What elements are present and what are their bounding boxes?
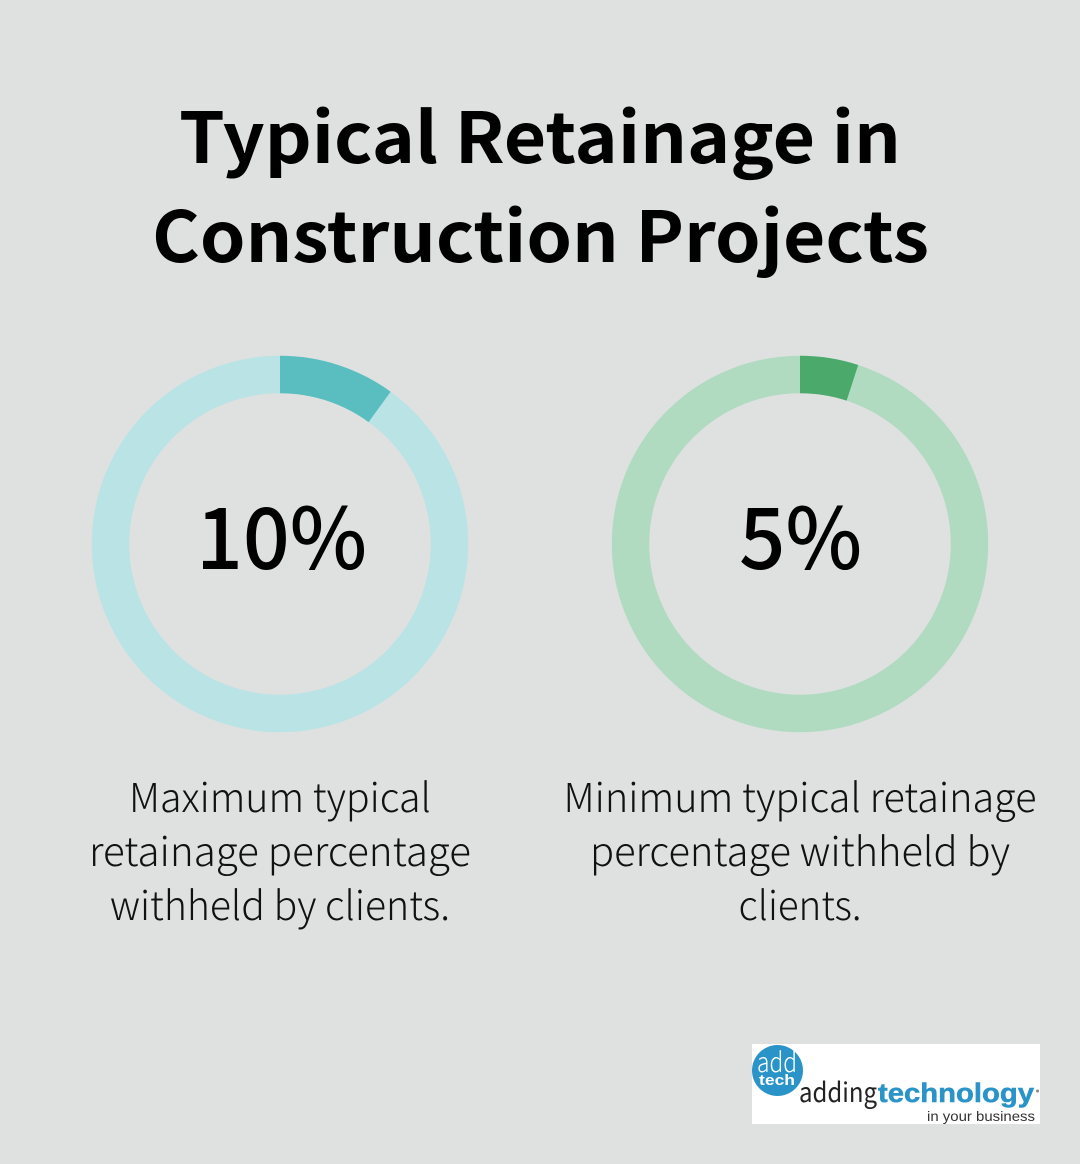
donut chart: 10% xyxy=(110,374,450,714)
panel: maximum retainage xyxy=(89,374,471,932)
title xyxy=(152,83,929,283)
description: minimum retainage xyxy=(564,766,1036,932)
logo: adding technology xyxy=(752,1041,1040,1124)
wordmark: technology xyxy=(878,1078,1034,1108)
icon: add tech badge: add xyxy=(757,1041,797,1080)
value: 10%: 10% xyxy=(196,471,367,594)
description: minimum retainage: Minimum typical retainage xyxy=(564,766,1036,824)
tagline: in your business xyxy=(927,1108,1035,1124)
description: maximum retainage: Maximum typical xyxy=(129,766,431,824)
wordmark xyxy=(799,1071,1039,1110)
description: maximum retainage: retainage percentage xyxy=(89,820,471,878)
description: maximum retainage xyxy=(89,766,471,932)
icon: add tech badge xyxy=(752,1041,803,1096)
title: Construction Projects xyxy=(152,182,929,283)
panel: minimum retainage xyxy=(564,374,1036,932)
icon: add tech badge: tech xyxy=(759,1072,795,1089)
wordmark: adding xyxy=(799,1071,877,1110)
description: minimum retainage: clients. xyxy=(738,874,862,932)
value: 5%: 5% xyxy=(739,471,862,594)
donut chart: 5% xyxy=(630,374,970,714)
description: minimum retainage: percentage withheld by xyxy=(590,820,1010,878)
description: maximum retainage: withheld by clients. xyxy=(110,874,450,932)
title: Typical Retainage in xyxy=(179,83,901,184)
